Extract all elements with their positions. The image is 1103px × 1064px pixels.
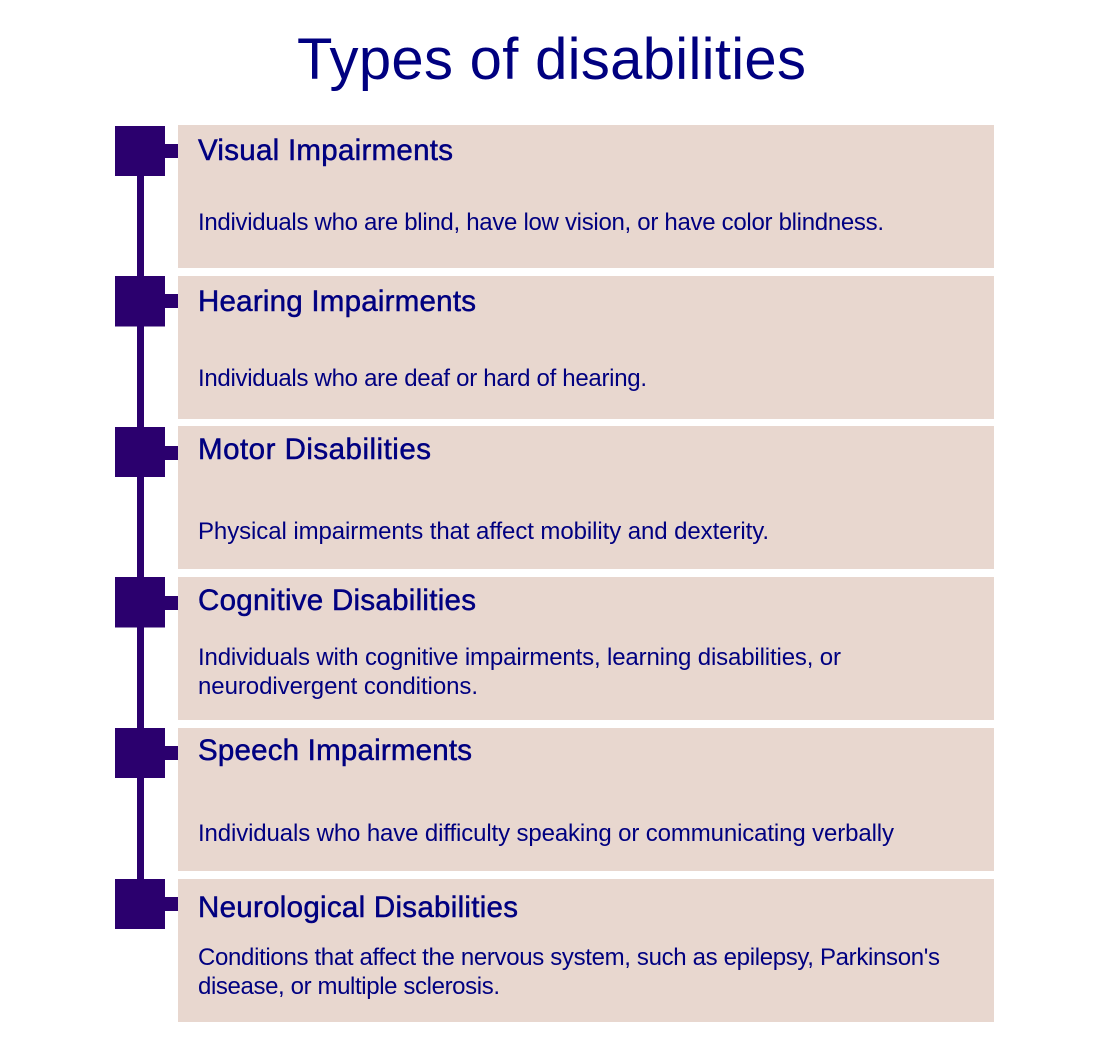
marker: motor disabilities	[115, 427, 178, 477]
text: neurological disabilities: Conditions that affect the nervous system, such as epilepsy, Parkinson's	[198, 944, 940, 971]
panel: cognitive disabilities	[115, 577, 994, 720]
panel: visual impairments	[115, 125, 994, 268]
title: Types of disabilities	[297, 27, 806, 92]
panel: motor disabilities	[115, 426, 994, 569]
heading: motor disabilities: Motor Disabilities	[198, 433, 431, 466]
marker: cognitive disabilities	[115, 577, 178, 628]
heading: cognitive disabilities: Cognitive Disabilities	[198, 584, 476, 617]
heading: neurological disabilities: Neurological Disabilities	[198, 891, 518, 924]
heading: speech impairments: Speech Impairments	[198, 734, 472, 767]
heading: visual impairments: Visual Impairments	[198, 134, 453, 167]
marker: neurological disabilities	[115, 879, 178, 929]
panel: speech impairments	[115, 728, 994, 871]
panel: neurological disabilities	[115, 879, 994, 1022]
marker: hearing impairments	[115, 276, 178, 326]
marker: visual impairments	[115, 126, 178, 176]
text: visual impairments: Individuals who are blind, have low vision, or have color blindness.	[198, 209, 884, 236]
heading: hearing impairments: Hearing Impairments	[198, 285, 476, 318]
panel: neurological disabilities: disease, or multiple sclerosis.	[198, 973, 500, 1000]
text: cognitive disabilities: Individuals with cognitive impairments, learning disabilities, or	[198, 644, 841, 671]
text: speech impairments: Individuals who have difficulty speaking or communicating verbally	[198, 820, 894, 847]
timeline spine	[137, 170, 144, 885]
text: motor disabilities: Physical impairments that affect mobility and dexterity.	[198, 518, 769, 545]
panel: cognitive disabilities: neurodivergent conditions.	[198, 673, 478, 700]
marker: speech impairments	[115, 728, 178, 778]
panel: hearing impairments	[115, 276, 994, 419]
text: hearing impairments: Individuals who are deaf or hard of hearing.	[198, 365, 647, 392]
